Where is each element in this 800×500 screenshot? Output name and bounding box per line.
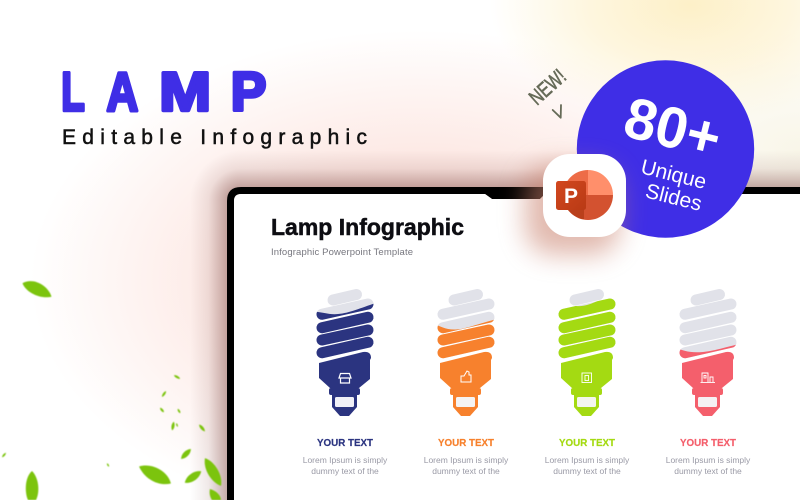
description bbox=[666, 455, 751, 476]
description bbox=[424, 455, 509, 476]
icon: PowerPoint: P bbox=[564, 185, 578, 208]
description bbox=[545, 455, 630, 476]
icon: PowerPoint bbox=[543, 154, 626, 237]
badge caption: Unique bbox=[638, 155, 709, 194]
title: LAMP: P bbox=[231, 62, 266, 123]
lamp 4: coral bbox=[666, 294, 751, 476]
title: LAMP: M bbox=[159, 62, 211, 123]
title: LAMP: A bbox=[106, 61, 138, 123]
icon: building bbox=[582, 373, 592, 382]
description: dummy text of the bbox=[553, 466, 621, 476]
slide subheading: Infographic Powerpoint Template bbox=[271, 247, 413, 258]
icon shadow bbox=[525, 165, 620, 255]
badge: 80+ unique slides bbox=[577, 60, 754, 238]
lamp 1: navy bbox=[303, 294, 388, 476]
new label: NEW! bbox=[525, 65, 571, 110]
title: LAMP: L bbox=[61, 62, 85, 123]
lamp 2: orange bbox=[424, 294, 509, 476]
badge number: 80+ bbox=[618, 85, 728, 171]
icon: thumb up bbox=[461, 371, 471, 382]
slide heading: Lamp Infographic bbox=[271, 214, 464, 240]
laptop frame bbox=[227, 187, 800, 500]
description: Lorem Ipsum is simply bbox=[424, 455, 509, 465]
arrow: new chevron bbox=[553, 105, 561, 118]
description: Lorem Ipsum is simply bbox=[666, 455, 751, 465]
decorative leaves bbox=[1, 277, 226, 500]
description: Lorem Ipsum is simply bbox=[303, 455, 388, 465]
description: Lorem Ipsum is simply bbox=[545, 455, 630, 465]
badge caption bbox=[638, 155, 709, 216]
label: YOUR TEXT bbox=[680, 437, 737, 449]
label: YOUR TEXT bbox=[438, 437, 495, 449]
icon: store bbox=[339, 374, 351, 383]
description: dummy text of the bbox=[432, 466, 500, 476]
title: LAMP bbox=[61, 61, 266, 123]
label: YOUR TEXT bbox=[559, 437, 616, 449]
label: YOUR TEXT bbox=[317, 437, 374, 449]
icon: office bbox=[700, 373, 715, 382]
laptop shadow bbox=[190, 150, 800, 500]
description bbox=[303, 455, 388, 476]
badge caption: Slides bbox=[643, 180, 704, 216]
description: dummy text of the bbox=[674, 466, 742, 476]
lamp 3: green bbox=[545, 294, 630, 476]
description: dummy text of the bbox=[311, 466, 379, 476]
subtitle: Editable Infographic bbox=[62, 126, 367, 149]
